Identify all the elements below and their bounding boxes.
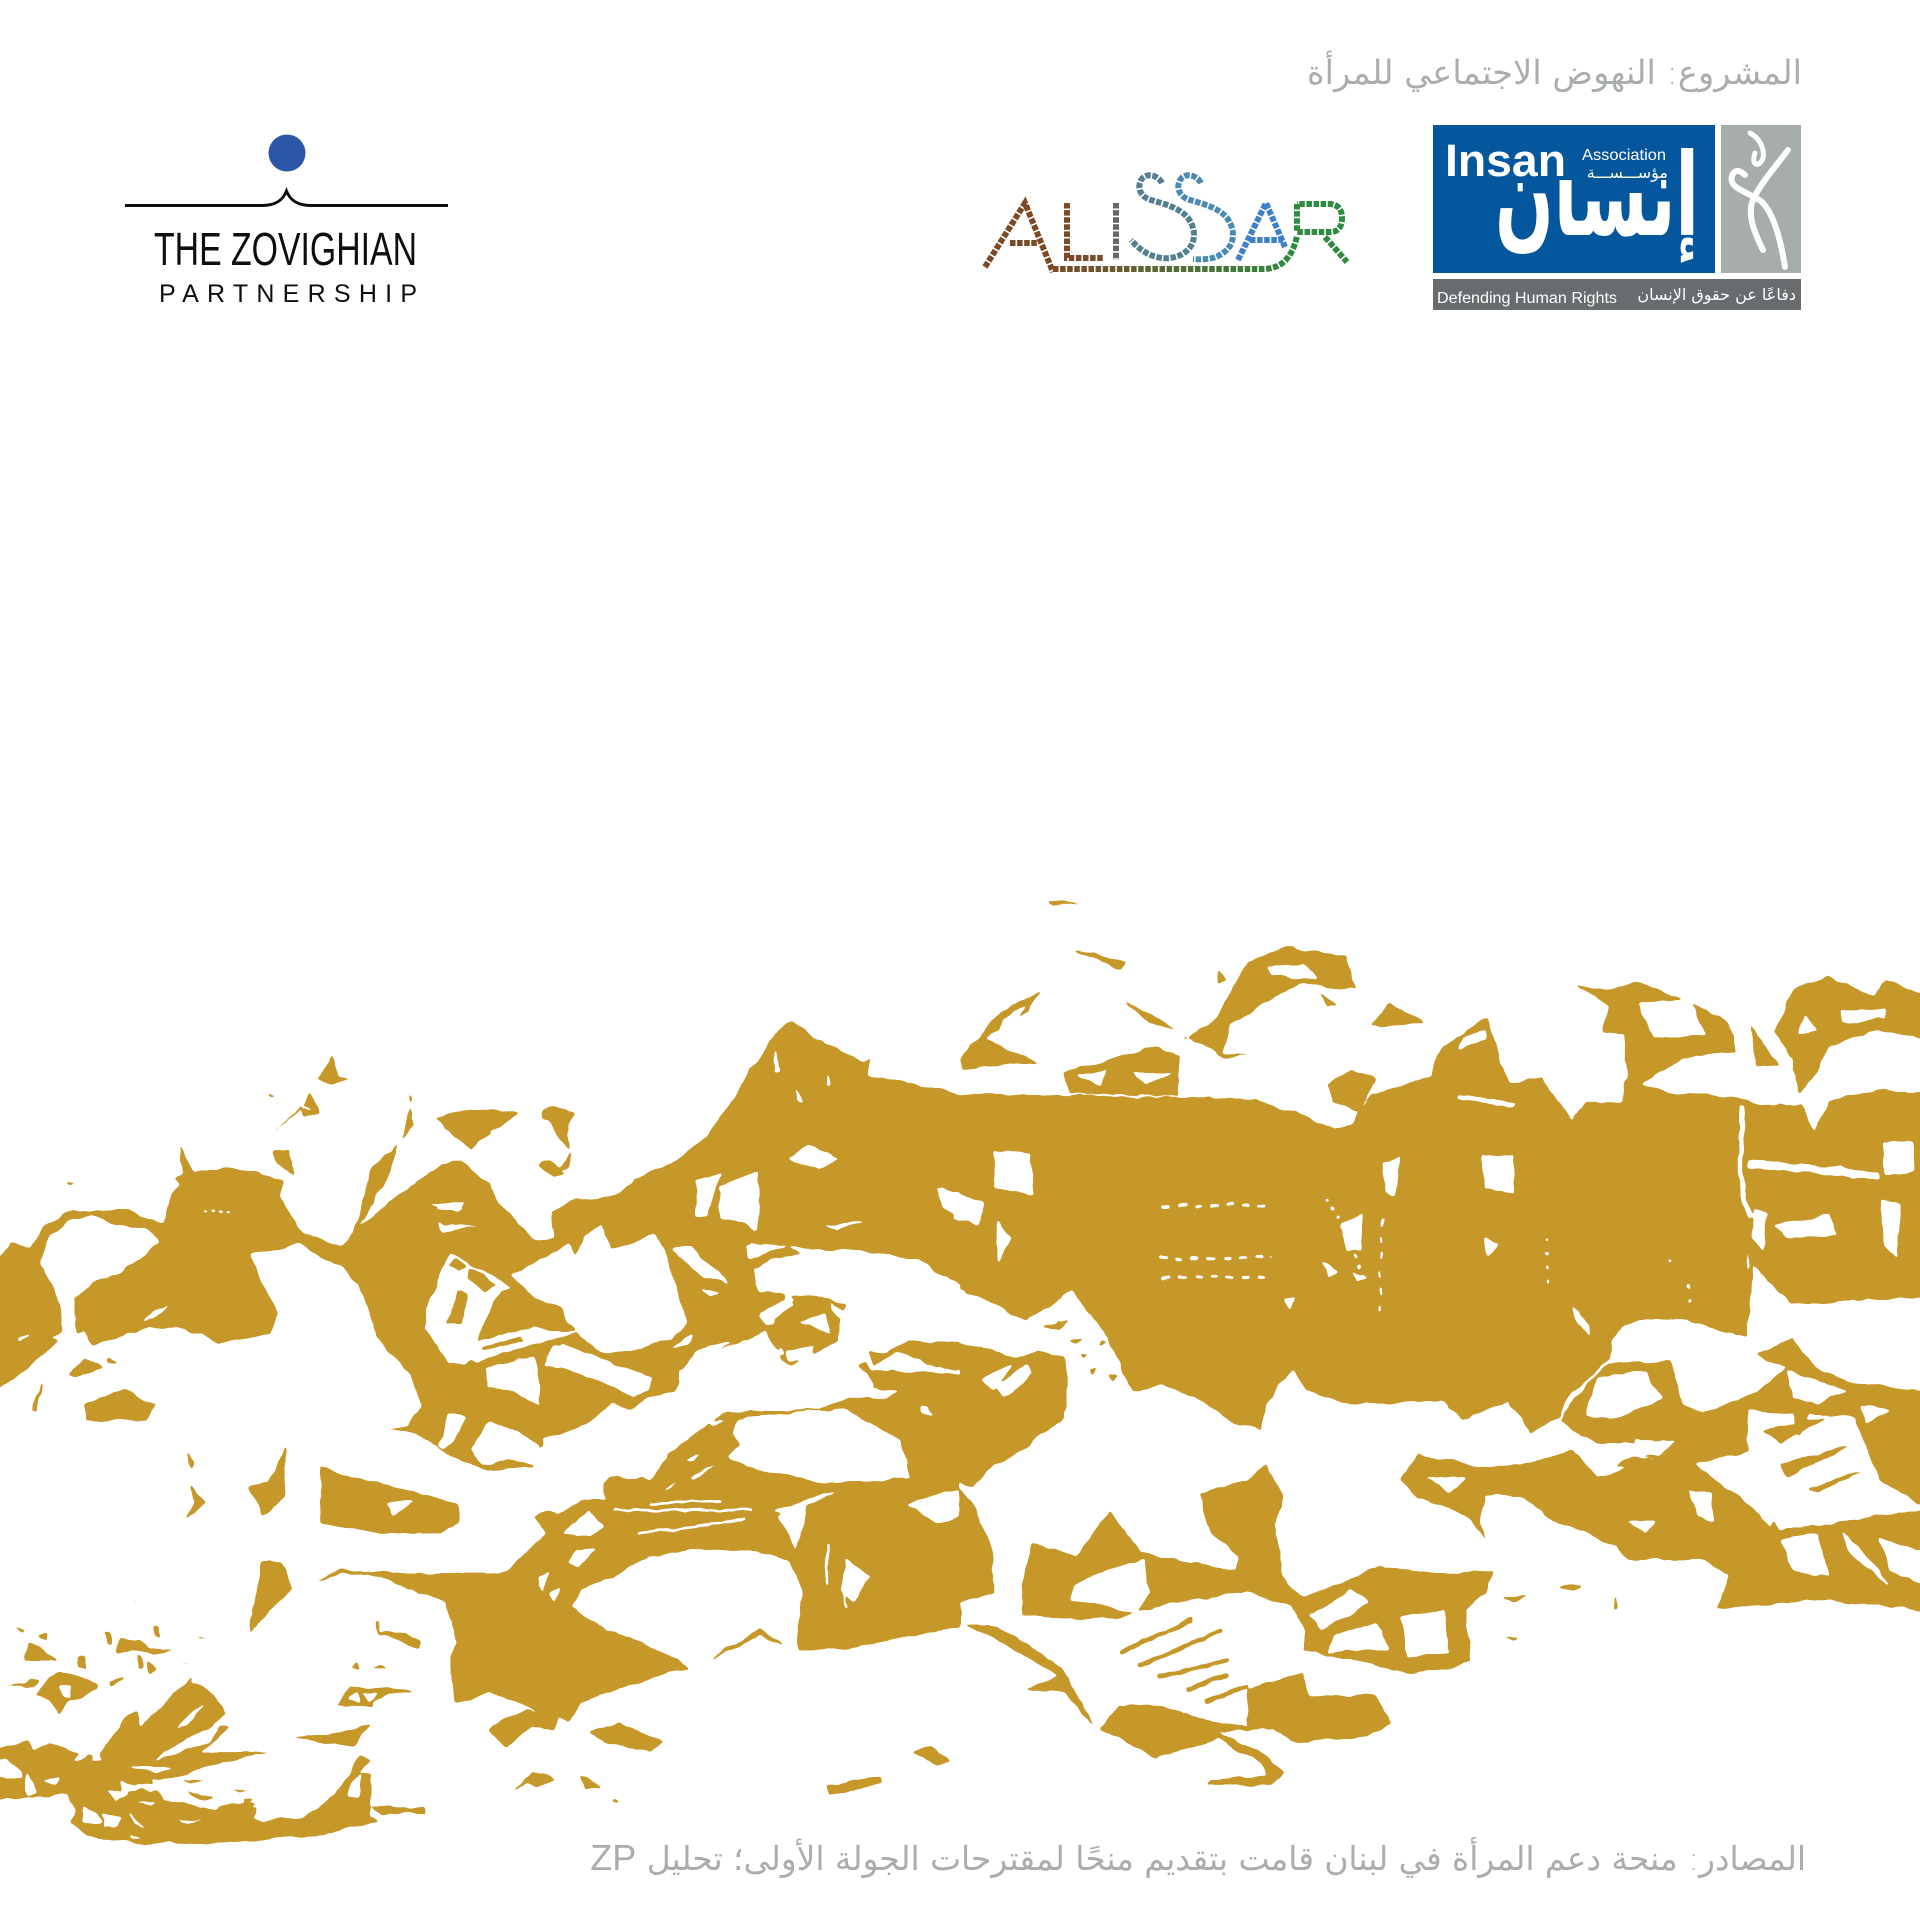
Insan wordmark, tagline and dancer figure: مؤســـســـة: [1587, 163, 1668, 183]
logo: Alissar: [982, 172, 1350, 274]
logo: Zovighian Partnership: THE ZOVIGHIAN: [154, 223, 417, 275]
Insan wordmark, tagline and dancer figure: دفاعًا عن حقوق الإنسان: [1637, 285, 1796, 305]
logo: Zovighian Partnership: [125, 134, 448, 308]
Insan wordmark, tagline and dancer figure: Insan: [1445, 135, 1566, 186]
logo: Insan Association: [1433, 125, 1801, 310]
dark bar: [1433, 279, 1801, 310]
grey panel: [1721, 125, 1801, 273]
Insan wordmark, tagline and dancer figure: Defending Human Rights: [1437, 290, 1617, 307]
source line: المصادر: منحة دعم المرأة في لبنان قامت بتقديم منحًا لمقترحات الجولة الأولى؛ تحليل ZP: [590, 1837, 1806, 1878]
Insan wordmark, tagline and dancer figure: [1437, 130, 1796, 307]
Insan wordmark, tagline and dancer figure: Association: [1582, 147, 1666, 164]
Insan wordmark, tagline and dancer figure: إنسان: [1495, 130, 1699, 264]
logo: Zovighian Partnership: PARTNERSHIP: [159, 280, 417, 308]
header text: project name: المشروع: النهوض الاجتماعي للمرأة: [1307, 53, 1802, 92]
blue panel: [1433, 125, 1715, 273]
